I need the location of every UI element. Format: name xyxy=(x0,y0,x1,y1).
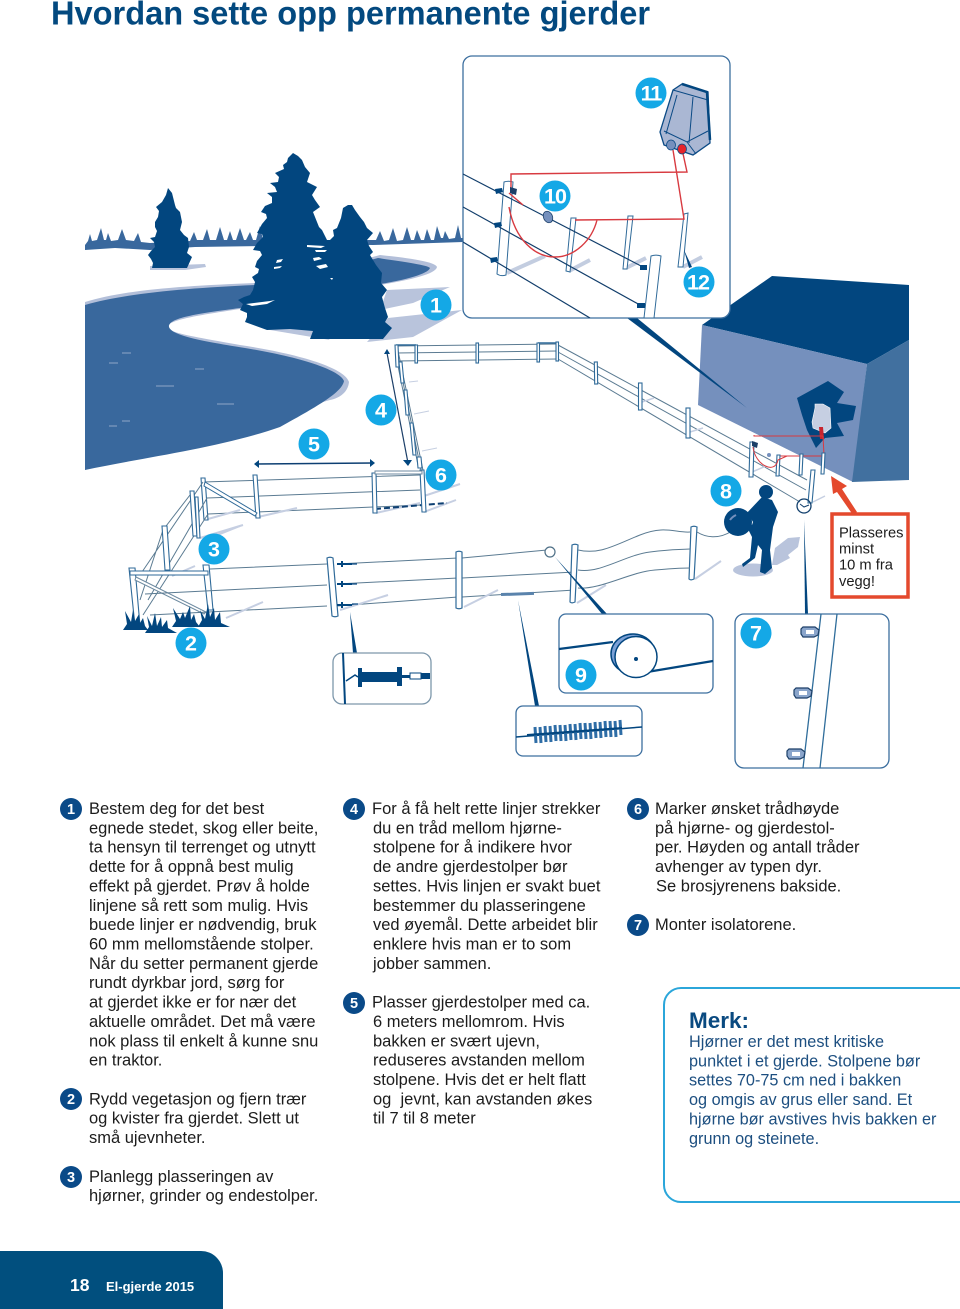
step 4 text: enklere hvis man er to som xyxy=(373,936,571,954)
distant treeline xyxy=(85,225,463,250)
step 1 text: at gjerdet ikke er for nær det xyxy=(89,994,297,1012)
step 4 text: de andre gjerdestolper bør xyxy=(373,858,568,876)
insulator xyxy=(787,627,819,759)
fence insulators xyxy=(490,188,647,308)
step 5 text: 5 xyxy=(350,996,358,1012)
footer tab: 18 xyxy=(70,1275,90,1295)
side wall xyxy=(852,340,909,482)
badge 10 xyxy=(540,180,570,212)
badge 3: 3 xyxy=(208,538,220,562)
step 6 text: 6 xyxy=(634,802,642,818)
energizer on wall xyxy=(812,404,831,433)
step 6 text: Se brosjyrenens bakside. xyxy=(656,877,841,895)
callout: minimum distance: minst xyxy=(839,542,874,558)
badge 2: 2 xyxy=(185,632,197,656)
note body: grunn og steinete. xyxy=(689,1130,819,1148)
step 3 text: Planlegg plasseringen av xyxy=(89,1168,274,1186)
step 1 text: aktuelle området. Det må være xyxy=(89,1013,316,1031)
energizer unit xyxy=(660,84,710,155)
step 1 text: linjene så rett som mulig. Hvis xyxy=(89,897,308,915)
badge 9 xyxy=(566,660,596,690)
roof xyxy=(702,276,909,364)
badge 2 xyxy=(176,628,206,658)
step 6 text xyxy=(627,798,860,895)
lake bank highlight xyxy=(85,255,437,470)
wire reel xyxy=(724,508,752,536)
grass xyxy=(123,604,230,633)
step 7 text: Monter isolatorene. xyxy=(655,916,796,934)
step 2 text: 2 xyxy=(67,1092,75,1108)
tree group: large and right tree xyxy=(238,153,392,339)
footer tab xyxy=(0,1251,223,1309)
beam from inset xyxy=(627,318,747,408)
fence: corner run with measure line xyxy=(384,345,455,480)
fence: front run xyxy=(145,526,732,618)
step 1 text: Bestem deg for det best xyxy=(89,800,265,818)
badge 10: 10 xyxy=(544,184,567,208)
step 1 text: en traktor. xyxy=(89,1052,162,1070)
inset: gate handle xyxy=(333,612,431,704)
badge 3 xyxy=(198,534,230,564)
arrow: span 4 xyxy=(384,349,412,466)
step 7 text xyxy=(627,914,796,936)
step 4 text xyxy=(343,798,601,973)
step 5 text: bakken er svært ujevn, xyxy=(373,1032,540,1050)
fence: left corner xyxy=(129,482,240,626)
step 2 text: Rydd vegetasjon og fjern trær xyxy=(89,1090,307,1108)
step 5 text: reduseres avstanden mellom xyxy=(373,1052,585,1070)
step 4 text: bestemmer du plasseringene xyxy=(373,897,586,915)
step 4 text: du en tråd mellom hjørne- xyxy=(373,819,562,837)
step 2 text xyxy=(60,1088,307,1147)
footer tab: El-gjerde 2015 xyxy=(106,1279,194,1294)
step 3 text xyxy=(60,1166,318,1205)
building xyxy=(627,276,909,482)
step 1 text: 60 mm mellomstående stolper. xyxy=(89,936,314,954)
tree shadows xyxy=(150,264,462,342)
step 2 text: små ujevnheter. xyxy=(89,1129,205,1147)
badge 7 xyxy=(740,618,772,648)
step 1 text: buede linjer er nødvendig, bruk xyxy=(89,916,317,934)
step 6 text: avhenger av typen dyr. xyxy=(655,858,822,876)
wavy slack wires xyxy=(578,530,732,588)
step 4 text: For å få helt rette linjer strekker xyxy=(372,800,601,818)
badge 1 xyxy=(420,290,452,320)
step 1 text: nok plass til enkelt å kunne snu xyxy=(89,1032,318,1050)
star highlight xyxy=(797,381,856,448)
step 6 text: per. Høyden og antall tråder xyxy=(655,839,860,857)
front wall xyxy=(698,325,867,482)
pulley xyxy=(545,547,555,557)
step 1 text: effekt på gjerdet. Prøv å holde xyxy=(89,877,310,895)
badge 12 xyxy=(684,266,714,298)
callout: minimum distance xyxy=(831,476,908,597)
note heading: Merk: xyxy=(689,1008,749,1033)
badge 11 xyxy=(636,78,666,108)
callout: minimum distance: Plasseres xyxy=(839,526,904,542)
step 7 text: 7 xyxy=(634,918,642,934)
note body: Hjørner er det mest kritiske xyxy=(689,1033,884,1051)
number badges xyxy=(176,78,772,690)
badge 4: 4 xyxy=(375,398,387,422)
badge 11: 11 xyxy=(641,82,662,106)
step 4 text: ved øyemål. Dette arbeidet blir xyxy=(373,916,598,934)
step 5 text: Plasser gjerdestolper med ca. xyxy=(372,994,590,1012)
step 1 text: egnede stedet, skog eller beite, xyxy=(89,819,318,837)
step 6 text: på hjørne- og gjerdestol- xyxy=(655,819,835,837)
step 3 text: hjørner, grinder og endestolper. xyxy=(89,1187,318,1205)
step 1 text: dette for å oppnå best mulig xyxy=(89,858,294,876)
inset: pulley xyxy=(555,557,713,693)
note body: settes 70-75 cm ned i bakken xyxy=(689,1072,901,1090)
badge 6: 6 xyxy=(435,464,447,488)
badge 8 xyxy=(710,476,742,506)
callout: minimum distance: 10 m fra xyxy=(839,558,894,574)
step 1 text: 1 xyxy=(67,802,75,818)
arrow: red xyxy=(831,476,857,515)
tree: small xyxy=(148,188,192,268)
badge 8: 8 xyxy=(720,480,732,504)
fence: middle run xyxy=(200,459,460,538)
note body: og omgis av grus eller sand. Et xyxy=(689,1091,913,1109)
badge 5 xyxy=(298,428,330,460)
fence: right run xyxy=(558,345,825,513)
step 2 text: og kvister fra gjerdet. Slett ut xyxy=(89,1110,299,1128)
step 1 text: ta hensyn til terrenget og utnytt xyxy=(89,839,316,857)
arrow: span 5 xyxy=(254,459,375,468)
lake xyxy=(85,258,430,470)
inset: energizer connection xyxy=(463,56,730,318)
badge 4 xyxy=(366,394,396,426)
step 5 text: til 7 til 8 meter xyxy=(373,1110,476,1128)
person with wire reel xyxy=(724,485,800,576)
badge 9: 9 xyxy=(575,664,587,688)
callout: minimum distance: vegg! xyxy=(839,574,875,590)
badge 6 xyxy=(426,460,456,490)
fence: top run xyxy=(396,342,558,363)
step 4 text: jobber sammen. xyxy=(372,955,491,973)
tree branch gaps xyxy=(246,245,333,306)
note body: punktet i et gjerde. Stolpene bør xyxy=(689,1052,921,1070)
step 1 text xyxy=(60,798,318,1070)
inset: wire spring xyxy=(516,600,642,756)
badge 7: 7 xyxy=(750,622,762,646)
step 4 text: 4 xyxy=(350,802,358,818)
lake glints xyxy=(109,353,234,426)
step 4 text: settes. Hvis linjen er svakt buet xyxy=(373,877,601,895)
step 1 text: rundt dyrkbar jord, sørg for xyxy=(89,974,285,992)
step 4 text: stolpene for å indikere hvor xyxy=(373,839,573,857)
note body: hjørne bør avstives hvis bakken er xyxy=(689,1110,937,1128)
step 5 text xyxy=(343,992,592,1128)
inset: insulators xyxy=(735,520,889,768)
gate handles xyxy=(337,561,352,608)
step 5 text: 6 meters mellomrom. Hvis xyxy=(373,1013,565,1031)
step 6 text: Marker ønsket trådhøyde xyxy=(655,800,839,818)
step 5 text: stolpene. Hvis det er helt flatt xyxy=(373,1071,586,1089)
badge 12: 12 xyxy=(687,270,710,294)
step 1 text: Når du setter permanent gjerde xyxy=(89,955,318,973)
note body xyxy=(689,1033,937,1148)
badge 5: 5 xyxy=(308,432,320,456)
badge 1: 1 xyxy=(430,294,442,318)
note panel xyxy=(664,988,960,1202)
step 3 text: 3 xyxy=(67,1170,75,1186)
step 5 text: og jevnt, kan avstanden økes xyxy=(373,1090,592,1108)
landscape: lake and trees xyxy=(85,153,463,470)
spring xyxy=(501,592,534,596)
